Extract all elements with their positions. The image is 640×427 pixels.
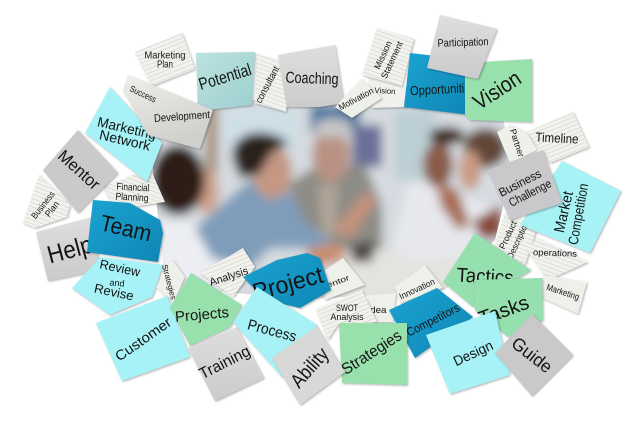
note: Marketing right: Marketing <box>545 282 581 302</box>
note: Idea <box>368 293 396 322</box>
note: Opportunities: Opportunities <box>410 80 477 98</box>
note: Review and Revise <box>72 256 163 315</box>
note: Competitors: Competitors <box>404 301 462 339</box>
note: Business Plan <box>23 175 70 228</box>
note: Mentor: Mentor <box>54 146 104 194</box>
note: Ability: Ability <box>286 344 334 392</box>
note: Process: Process <box>246 316 298 346</box>
note: Potential: Potential <box>196 60 254 94</box>
note: Coaching <box>278 45 344 107</box>
note: Strategies green: Strategies <box>339 327 405 379</box>
note: Market Competition: Competition <box>565 182 591 246</box>
note: Business Plan: Business <box>29 189 57 221</box>
note: Projects <box>170 273 242 346</box>
note: Analysis <box>200 248 255 297</box>
note: Partner <box>497 125 537 163</box>
note: Mission Statement: Statement <box>379 39 405 80</box>
note: Training: Training <box>197 343 253 383</box>
note: Customer: Customer <box>112 314 175 364</box>
note: SWOT Analysis: Analysis <box>330 312 364 322</box>
note: Customer <box>96 296 190 381</box>
note: Success / Development: Success <box>128 84 158 105</box>
note: Business Plan: Plan <box>43 199 61 219</box>
note: Training <box>188 327 264 401</box>
note: Innovation <box>395 265 443 303</box>
note: Design <box>426 311 510 394</box>
note: Market Competition: Market <box>551 189 577 234</box>
older man in grey suit <box>287 165 382 250</box>
note: Success / Development: Development <box>154 109 210 125</box>
note: Marketing Network: Network <box>98 126 153 154</box>
note: Analysis: Analysis <box>208 265 250 289</box>
note: Mentor small: Mentor <box>317 273 351 293</box>
note: Business Challenge: Challenge <box>506 176 554 210</box>
note: Strategies small: Strategies <box>160 263 178 301</box>
man in blue shirt <box>195 180 337 268</box>
note: consultant <box>254 54 292 112</box>
note: Help <box>36 217 100 281</box>
note: Potential <box>196 52 255 111</box>
note: Timeline: Timeline <box>535 129 579 147</box>
note: Tasks <box>474 278 543 337</box>
note: Market Competition <box>520 161 621 253</box>
note: Product Description <box>493 213 537 265</box>
note: consultant: consultant <box>254 65 282 105</box>
note: Innovation: Innovation <box>398 276 436 302</box>
note: operations <box>527 238 588 280</box>
note: Mentor small <box>317 258 365 300</box>
note: Process <box>233 287 317 377</box>
note: Business Challenge <box>488 150 562 220</box>
note: Product Description: Product <box>497 219 519 251</box>
note: Review and Revise: Revise <box>93 281 135 303</box>
note: Vision: Vision <box>468 65 526 115</box>
note: Guide: Guide <box>508 333 556 377</box>
note: Mentor <box>43 130 118 213</box>
note: Mission Statement <box>362 28 414 86</box>
note: Vision small <box>368 75 408 108</box>
note: Marketing Plan <box>135 33 195 86</box>
note: Tasks: Tasks <box>476 292 532 330</box>
note: Strategies small <box>156 259 185 303</box>
note: Motivation: Motivation <box>337 86 375 112</box>
note: Business Challenge: Business <box>496 166 544 200</box>
note: Team <box>87 200 163 262</box>
note: Financial Planning: Financial <box>116 182 150 194</box>
blurred photo: business meeting <box>152 100 510 299</box>
note: Product Description: Description <box>505 220 531 260</box>
note: Idea: Idea <box>368 305 386 315</box>
note: Vision small: Vision <box>374 86 396 96</box>
note: Competitors <box>389 288 473 358</box>
note: Financial Planning <box>103 168 165 210</box>
note: Marketing right <box>542 275 587 314</box>
note: Opportunities <box>404 53 477 115</box>
note: Project: Project <box>250 262 327 306</box>
note: Partner: Partner <box>508 128 526 158</box>
note: Guide <box>495 314 573 396</box>
note: Ability <box>272 326 345 405</box>
note: Marketing Plan: Plan <box>157 60 173 70</box>
note: Success / Development <box>123 75 213 149</box>
note: Marketing Network <box>85 87 162 182</box>
note: Design: Design <box>451 337 495 369</box>
note: Participation <box>427 15 497 79</box>
woman left <box>160 218 225 292</box>
note: Coaching: Coaching <box>285 70 339 88</box>
note: Tactics: Tactics <box>456 265 514 289</box>
note: Review and Revise: Review <box>98 256 142 280</box>
note: Projects: Projects <box>174 304 230 326</box>
note: Participation: Participation <box>437 36 489 50</box>
note: Team: Team <box>98 209 154 247</box>
note: Help: Help <box>44 231 96 269</box>
note: SWOT Analysis <box>316 290 377 340</box>
note: Marketing Network: Marketing <box>96 113 158 143</box>
woman right <box>394 180 491 258</box>
note: SWOT Analysis: SWOT <box>336 303 358 313</box>
note: Tactics <box>443 233 531 307</box>
note: Timeline <box>527 112 589 163</box>
note: Mission Statement: Mission <box>372 39 394 71</box>
note: operations: operations <box>533 247 578 259</box>
note: Financial Planning: Planning <box>115 192 149 204</box>
note: Motivation <box>335 79 382 118</box>
note: Marketing Plan: Marketing <box>144 50 186 62</box>
note: Review and Revise: and <box>109 277 125 289</box>
